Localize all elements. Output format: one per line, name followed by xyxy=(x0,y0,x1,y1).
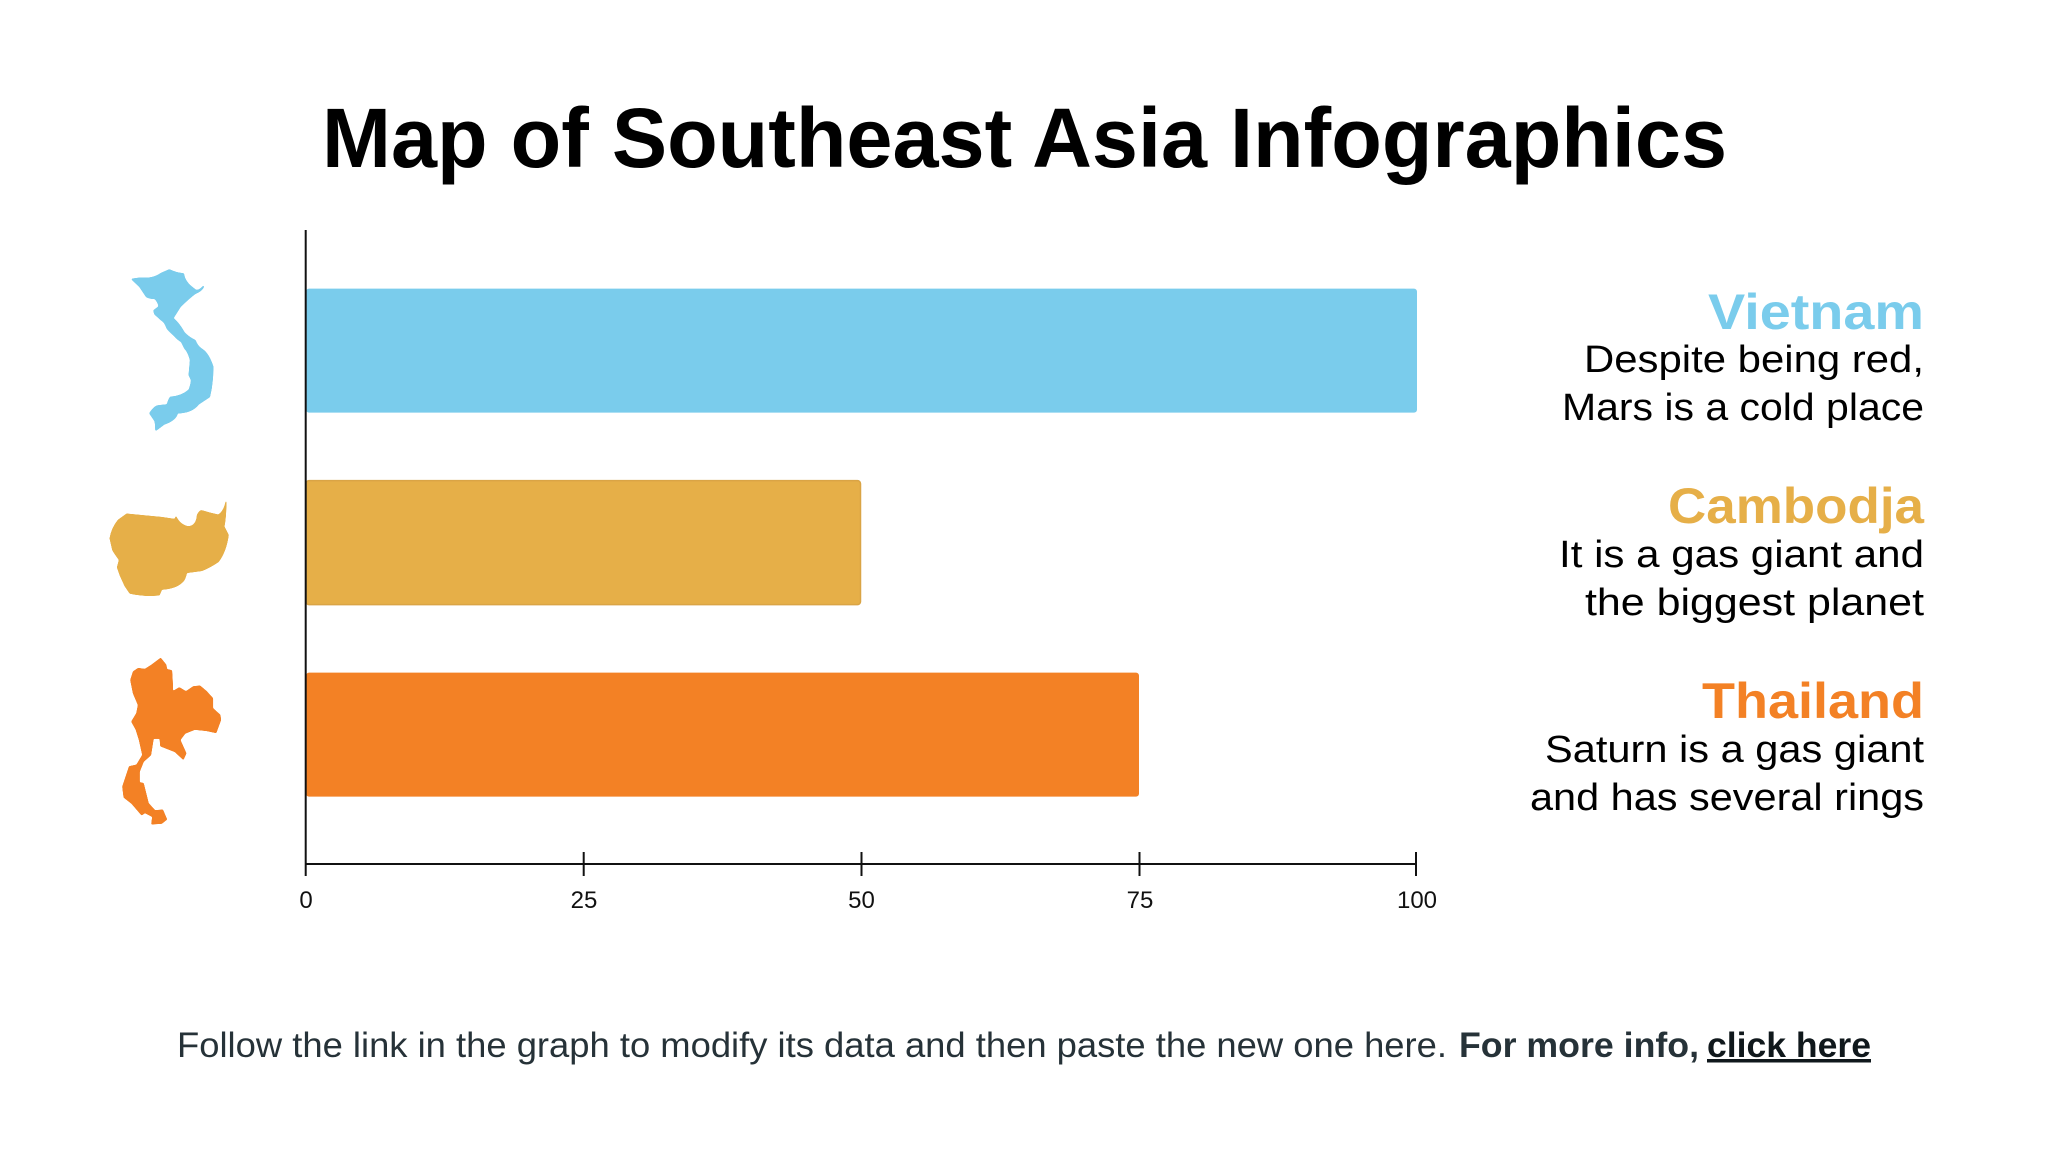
description: Vietnam: Despite being red, xyxy=(1584,339,1924,381)
bar: Thailand xyxy=(306,673,1139,797)
axis labels xyxy=(299,887,1437,914)
axis labels: 75 xyxy=(1127,887,1153,914)
text block: Thailand xyxy=(1530,673,1924,819)
footer note: Follow the link in the graph to modify its data and then paste the new one here. xyxy=(177,1026,1447,1065)
horizontal axis xyxy=(305,852,1417,876)
icon: Thailand map xyxy=(123,658,221,824)
axis labels: 50 xyxy=(848,887,875,914)
bar: Vietnam xyxy=(306,289,1417,413)
axis labels: 100 xyxy=(1397,887,1437,914)
heading: Thailand: Thailand xyxy=(1702,673,1924,729)
footer note: click here xyxy=(1707,1026,1871,1065)
description: Thailand xyxy=(1530,729,1924,819)
description: Cambodja: It is a gas giant and xyxy=(1559,534,1924,576)
heading: Vietnam: Vietnam xyxy=(1708,284,1924,340)
text block: Cambodja xyxy=(1559,478,1925,624)
icon: Vietnam map xyxy=(132,270,213,430)
icon: Cambodja map xyxy=(110,502,228,596)
description: Cambodja: the biggest planet xyxy=(1585,582,1924,624)
footer note: For more info, xyxy=(1459,1026,1699,1065)
description: Vietnam xyxy=(1562,339,1924,429)
title: Map of Southeast Asia Infographics xyxy=(322,91,1727,185)
bar chart xyxy=(299,230,1437,914)
description: Vietnam: Mars is a cold place xyxy=(1562,387,1924,429)
axis labels: 0 xyxy=(299,887,313,914)
bar: Cambodja xyxy=(306,481,860,605)
text block: Vietnam xyxy=(1562,284,1924,429)
description: Cambodja xyxy=(1559,534,1924,624)
axis labels: 25 xyxy=(571,887,597,914)
description: Thailand: and has several rings xyxy=(1530,777,1924,819)
vertical axis xyxy=(305,230,307,876)
heading: Cambodja: Cambodja xyxy=(1668,478,1925,534)
description: Thailand: Saturn is a gas giant xyxy=(1545,729,1924,771)
